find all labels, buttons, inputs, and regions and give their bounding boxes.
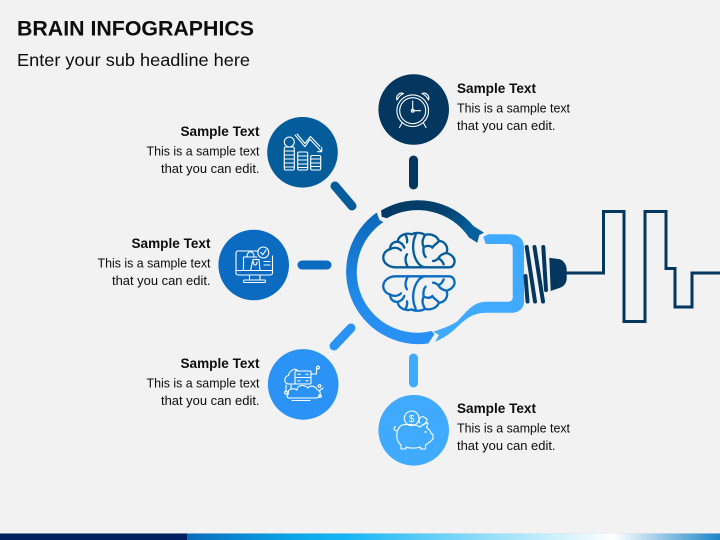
text: server: that you can edit. [161, 394, 260, 408]
circle: shopping [218, 230, 289, 300]
brain icon [383, 233, 455, 311]
icon: cloud server network [285, 366, 323, 400]
text: server [146, 355, 260, 408]
subtitle: Enter your sub headline here [17, 50, 250, 70]
text: piggy bank: This is a sample text [457, 422, 571, 436]
text: piggy bank: Sample Text [457, 400, 536, 416]
item: alarm clock [378, 74, 571, 145]
icon: piggy bank [394, 411, 433, 449]
item: piggy bank [378, 395, 571, 466]
text: clock: This is a sample text [457, 102, 571, 116]
icon: dollar sign: $ [409, 414, 415, 425]
icon: alarm clock [397, 93, 429, 128]
text: clock: that you can edit. [457, 119, 556, 133]
icon: coin stacks and falling arrow [284, 134, 322, 170]
text: coins: that you can edit. [161, 162, 260, 176]
ray: bottom [409, 358, 418, 383]
item: online shopping [98, 230, 289, 300]
footer bar [0, 533, 720, 540]
text: clock [457, 80, 571, 133]
circle: coins [267, 117, 338, 188]
ray: lower left [334, 328, 351, 346]
text: clock: Sample Text [457, 80, 536, 96]
text: coins: Sample Text [180, 123, 260, 139]
bulb socket [549, 258, 567, 291]
bulb arc: left [346, 212, 434, 344]
circle: clock [378, 74, 449, 145]
text: coins: This is a sample text [146, 144, 260, 158]
text: piggy bank: that you can edit. [457, 439, 556, 453]
title: BRAIN INFOGRAPHICS [17, 18, 254, 40]
item: cloud server [146, 349, 339, 420]
text: shopping: Sample Text [132, 235, 211, 251]
text: shopping: that you can edit. [112, 274, 210, 288]
circle: piggy bank [378, 395, 449, 466]
text: server: Sample Text [180, 355, 260, 371]
text: piggy bank [457, 400, 571, 453]
text: shopping [98, 235, 211, 288]
brain: lower half [383, 276, 455, 311]
brain: upper half [383, 233, 455, 267]
bulb screw threads [526, 247, 546, 302]
bulb arc: top [381, 200, 484, 243]
text: shopping: This is a sample text [98, 256, 211, 270]
icon: monitor with shopping bags [236, 247, 272, 282]
heartbeat wire [566, 212, 720, 322]
ray: upper left [335, 186, 352, 206]
ray: left [302, 260, 327, 270]
text: server: This is a sample text [146, 376, 260, 390]
ray: top [409, 160, 418, 185]
light bulb [346, 200, 567, 344]
circle: server [268, 349, 339, 420]
item: coins [146, 117, 338, 188]
text: coins [146, 123, 260, 176]
bulb body: neck [433, 234, 524, 342]
